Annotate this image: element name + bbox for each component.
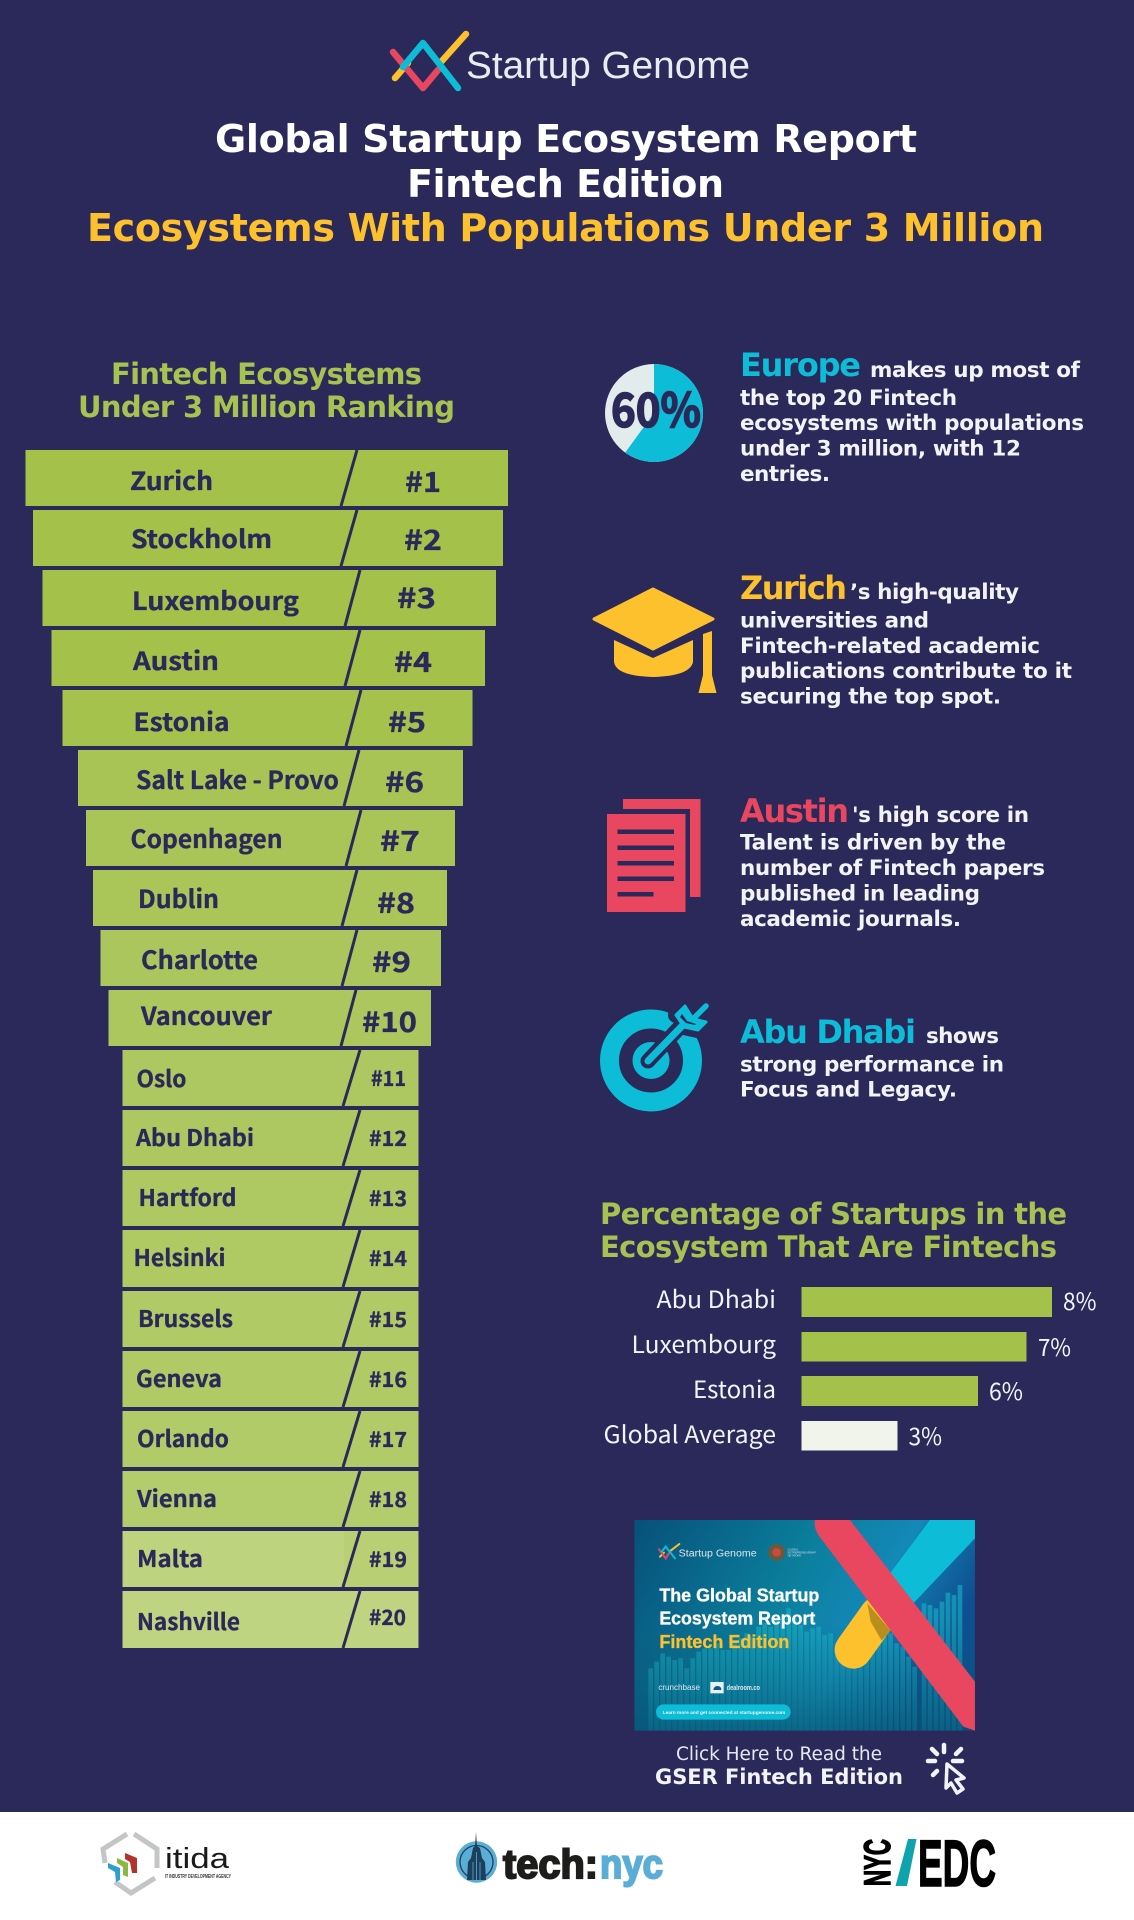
report cover: Learn more and get connected at startupgenome.com — [663, 1710, 786, 1716]
text: Europe — [740, 346, 1084, 487]
text: Austin: number of Fintech papers — [740, 856, 1045, 881]
row 1 Zurich: Zurich — [130, 462, 213, 498]
text: Austin: published in leading — [740, 882, 980, 906]
text: Zurich: ’s high-quality — [850, 580, 1019, 605]
text: Abu Dhabi: strong performance in — [740, 1052, 1004, 1078]
text: Europe: makes up most of — [870, 358, 1081, 383]
title: Fintech Edition — [407, 162, 724, 206]
icon: 60% pie — [605, 364, 703, 462]
row 10 Vancouver — [108, 990, 431, 1046]
text: Austin: academic journals. — [740, 907, 961, 932]
row 13 Hartford — [122, 1170, 418, 1226]
row 7 Copenhagen — [86, 810, 455, 866]
row 2 Stockholm: #2 — [404, 519, 442, 559]
row 12 Abu Dhabi: #12 — [369, 1123, 407, 1153]
report cover: Startup Genome — [679, 1549, 757, 1560]
bar Estonia 6%: 6% — [989, 1372, 1023, 1407]
bar Luxembourg 7% — [632, 1325, 1071, 1363]
row 17 Orlando: Orlando — [137, 1420, 229, 1454]
row 8 Dublin: #8 — [377, 882, 415, 922]
row 10 Vancouver: Vancouver — [140, 997, 272, 1033]
row 7 Copenhagen: #7 — [380, 820, 420, 860]
text: Europe: under 3 million, with 12 — [740, 436, 1021, 462]
text: Abu Dhabi: Abu Dhabi — [740, 1013, 916, 1051]
logo: NYC EDC — [857, 1826, 996, 1900]
report cover: Fintech Edition — [659, 1631, 789, 1652]
icon: graduation cap — [594, 589, 716, 693]
row 3 Luxembourg: #3 — [397, 577, 436, 617]
text: Austin — [740, 792, 1045, 932]
text: Europe: Europe — [740, 346, 861, 384]
row 1 Zurich: #1 — [405, 461, 441, 501]
bar Global Average 3%: Global Average — [604, 1415, 776, 1450]
row 12 Abu Dhabi — [122, 1110, 418, 1166]
row 15 Brussels: #15 — [369, 1304, 407, 1334]
row 3 Luxembourg: Luxembourg — [132, 582, 299, 618]
row 11 Oslo: #11 — [371, 1063, 406, 1093]
heading: funnel ranking: Under 3 Million Ranking — [78, 390, 455, 424]
row 4 Austin — [52, 630, 485, 686]
bar chart: percentage of fintech startups — [604, 1280, 1096, 1452]
text: Abu Dhabi: Focus and Legacy. — [740, 1078, 957, 1102]
row 2 Stockholm: Stockholm — [131, 520, 272, 556]
heading: bar chart — [600, 1197, 1067, 1264]
row 12 Abu Dhabi: Abu Dhabi — [135, 1119, 254, 1153]
heading: bar chart: Percentage of Startups in the — [600, 1197, 1067, 1231]
text: Zurich: Zurich — [740, 569, 847, 607]
report cover: The Global Startup — [659, 1584, 819, 1605]
row 17 Orlando — [122, 1411, 418, 1467]
text: Austin: Austin — [740, 792, 849, 830]
row 3 Luxembourg — [42, 570, 496, 626]
row 17 Orlando: #17 — [369, 1424, 407, 1454]
report cover: crunchbase — [658, 1683, 701, 1692]
text: Zurich: publications contribute to it — [740, 659, 1072, 684]
row 5 Estonia: #5 — [388, 701, 426, 741]
text: Abu Dhabi — [740, 1013, 1004, 1102]
row 20 Nashville — [122, 1591, 418, 1648]
call to action text: Click Here to Read the — [676, 1744, 882, 1765]
row 18 Vienna: Vienna — [136, 1480, 217, 1514]
footer band — [0, 1812, 1134, 1920]
heading: funnel ranking — [78, 357, 455, 424]
row 20 Nashville: #20 — [369, 1602, 406, 1632]
bar Estonia 6%: Estonia — [693, 1370, 776, 1405]
logo: NYC EDC: NYC — [857, 1839, 898, 1886]
text: Austin: 's high score in — [852, 803, 1029, 828]
text: Zurich: securing the top spot. — [740, 684, 1001, 710]
title: Global Startup Ecosystem Report — [215, 117, 917, 161]
row 8 Dublin: Dublin — [138, 880, 219, 916]
logo: Startup Genome: Startup Genome — [466, 45, 750, 87]
row 9 Charlotte — [100, 930, 441, 986]
text: Europe: entries. — [740, 462, 830, 487]
report cover: GLOBAL — [788, 1548, 799, 1552]
title: Ecosystems With Populations Under 3 Million — [87, 206, 1044, 250]
icon: documents — [607, 799, 700, 912]
bar Abu Dhabi 8%: 8% — [1063, 1282, 1096, 1317]
funnel chart: ranking — [26, 450, 508, 1648]
icon: 60% pie: 60% — [611, 372, 701, 441]
text: Europe: ecosystems with populations — [740, 411, 1084, 436]
row 1 Zurich — [26, 450, 508, 506]
report cover: ENTREPRENEURSHIP — [788, 1551, 816, 1555]
bar Abu Dhabi 8% — [656, 1280, 1096, 1317]
logo: tech:nyc: tech: — [503, 1841, 598, 1887]
logo: itida: itida — [165, 1843, 230, 1875]
text: Zurich — [740, 569, 1072, 710]
logo: tech:nyc: nyc — [600, 1841, 663, 1887]
text: Zurich: universities and — [740, 608, 929, 634]
row 6 Salt Lake - Provo: Salt Lake - Provo — [136, 761, 339, 797]
text: Europe: the top 20 Fintech — [740, 386, 957, 411]
row 2 Stockholm — [33, 510, 503, 566]
row 6 Salt Lake - Provo: #6 — [385, 761, 424, 801]
row 7 Copenhagen: Copenhagen — [130, 820, 282, 856]
row 9 Charlotte: Charlotte — [141, 941, 258, 977]
row 19 Malta — [122, 1531, 418, 1587]
report cover: NETWORK — [788, 1554, 801, 1558]
row 16 Geneva — [122, 1351, 418, 1407]
row 5 Estonia: Estonia — [134, 703, 230, 739]
text: Abu Dhabi: shows — [926, 1024, 999, 1049]
row 19 Malta: Malta — [137, 1540, 203, 1574]
bar Abu Dhabi 8%: Abu Dhabi — [656, 1280, 776, 1315]
row 10 Vancouver: #10 — [362, 1001, 417, 1041]
icon: click cursor — [928, 1745, 964, 1793]
logo: tech:nyc — [456, 1832, 663, 1887]
row 5 Estonia — [62, 690, 472, 746]
report cover: Ecosystem Report — [659, 1608, 815, 1629]
row 15 Brussels: Brussels — [138, 1300, 233, 1334]
bar Luxembourg 7%: 7% — [1038, 1328, 1071, 1363]
bar Luxembourg 7%: Luxembourg — [632, 1325, 776, 1360]
heading: funnel ranking: Fintech Ecosystems — [111, 357, 422, 391]
call to action text: GSER Fintech Edition — [655, 1765, 903, 1789]
row 13 Hartford: Hartford — [138, 1179, 236, 1213]
bar Global Average 3% — [604, 1415, 942, 1452]
call to action text — [655, 1744, 903, 1789]
row 16 Geneva: Geneva — [136, 1360, 222, 1394]
row 8 Dublin — [93, 870, 447, 926]
row 18 Vienna: #18 — [369, 1484, 407, 1514]
row 18 Vienna — [122, 1471, 418, 1527]
row 14 Helsinki: Helsinki — [134, 1239, 226, 1273]
bar Global Average 3%: 3% — [908, 1417, 942, 1452]
heading: bar chart: Ecosystem That Are Fintechs — [600, 1230, 1057, 1264]
logo: itida: IT INDUSTRY DEVELOPMENT AGENCY — [165, 1874, 231, 1880]
row 20 Nashville: Nashville — [137, 1603, 240, 1637]
row 4 Austin: Austin — [132, 642, 219, 678]
title — [87, 117, 1044, 250]
row 11 Oslo: Oslo — [136, 1060, 186, 1094]
logo: NYC EDC: EDC — [918, 1826, 996, 1900]
logo: itida — [103, 1834, 231, 1893]
row 4 Austin: #4 — [394, 641, 432, 681]
bar Estonia 6% — [693, 1370, 1023, 1407]
row 15 Brussels — [122, 1291, 418, 1347]
logo: Startup Genome — [393, 34, 750, 88]
row 13 Hartford: #13 — [369, 1183, 407, 1213]
icon: target with arrow — [610, 1006, 706, 1102]
text: Zurich: Fintech-related academic — [740, 634, 1040, 659]
row 19 Malta: #19 — [369, 1544, 407, 1574]
row 14 Helsinki: #14 — [369, 1243, 407, 1273]
text: Austin: Talent is driven by the — [740, 830, 1006, 856]
row 16 Geneva: #16 — [369, 1364, 407, 1394]
row 11 Oslo — [122, 1050, 418, 1106]
row 6 Salt Lake - Provo — [78, 750, 463, 806]
row 14 Helsinki — [122, 1230, 418, 1287]
report cover: dealroom.co — [727, 1685, 760, 1692]
report cover — [634, 1520, 975, 1731]
row 9 Charlotte: #9 — [372, 941, 411, 981]
